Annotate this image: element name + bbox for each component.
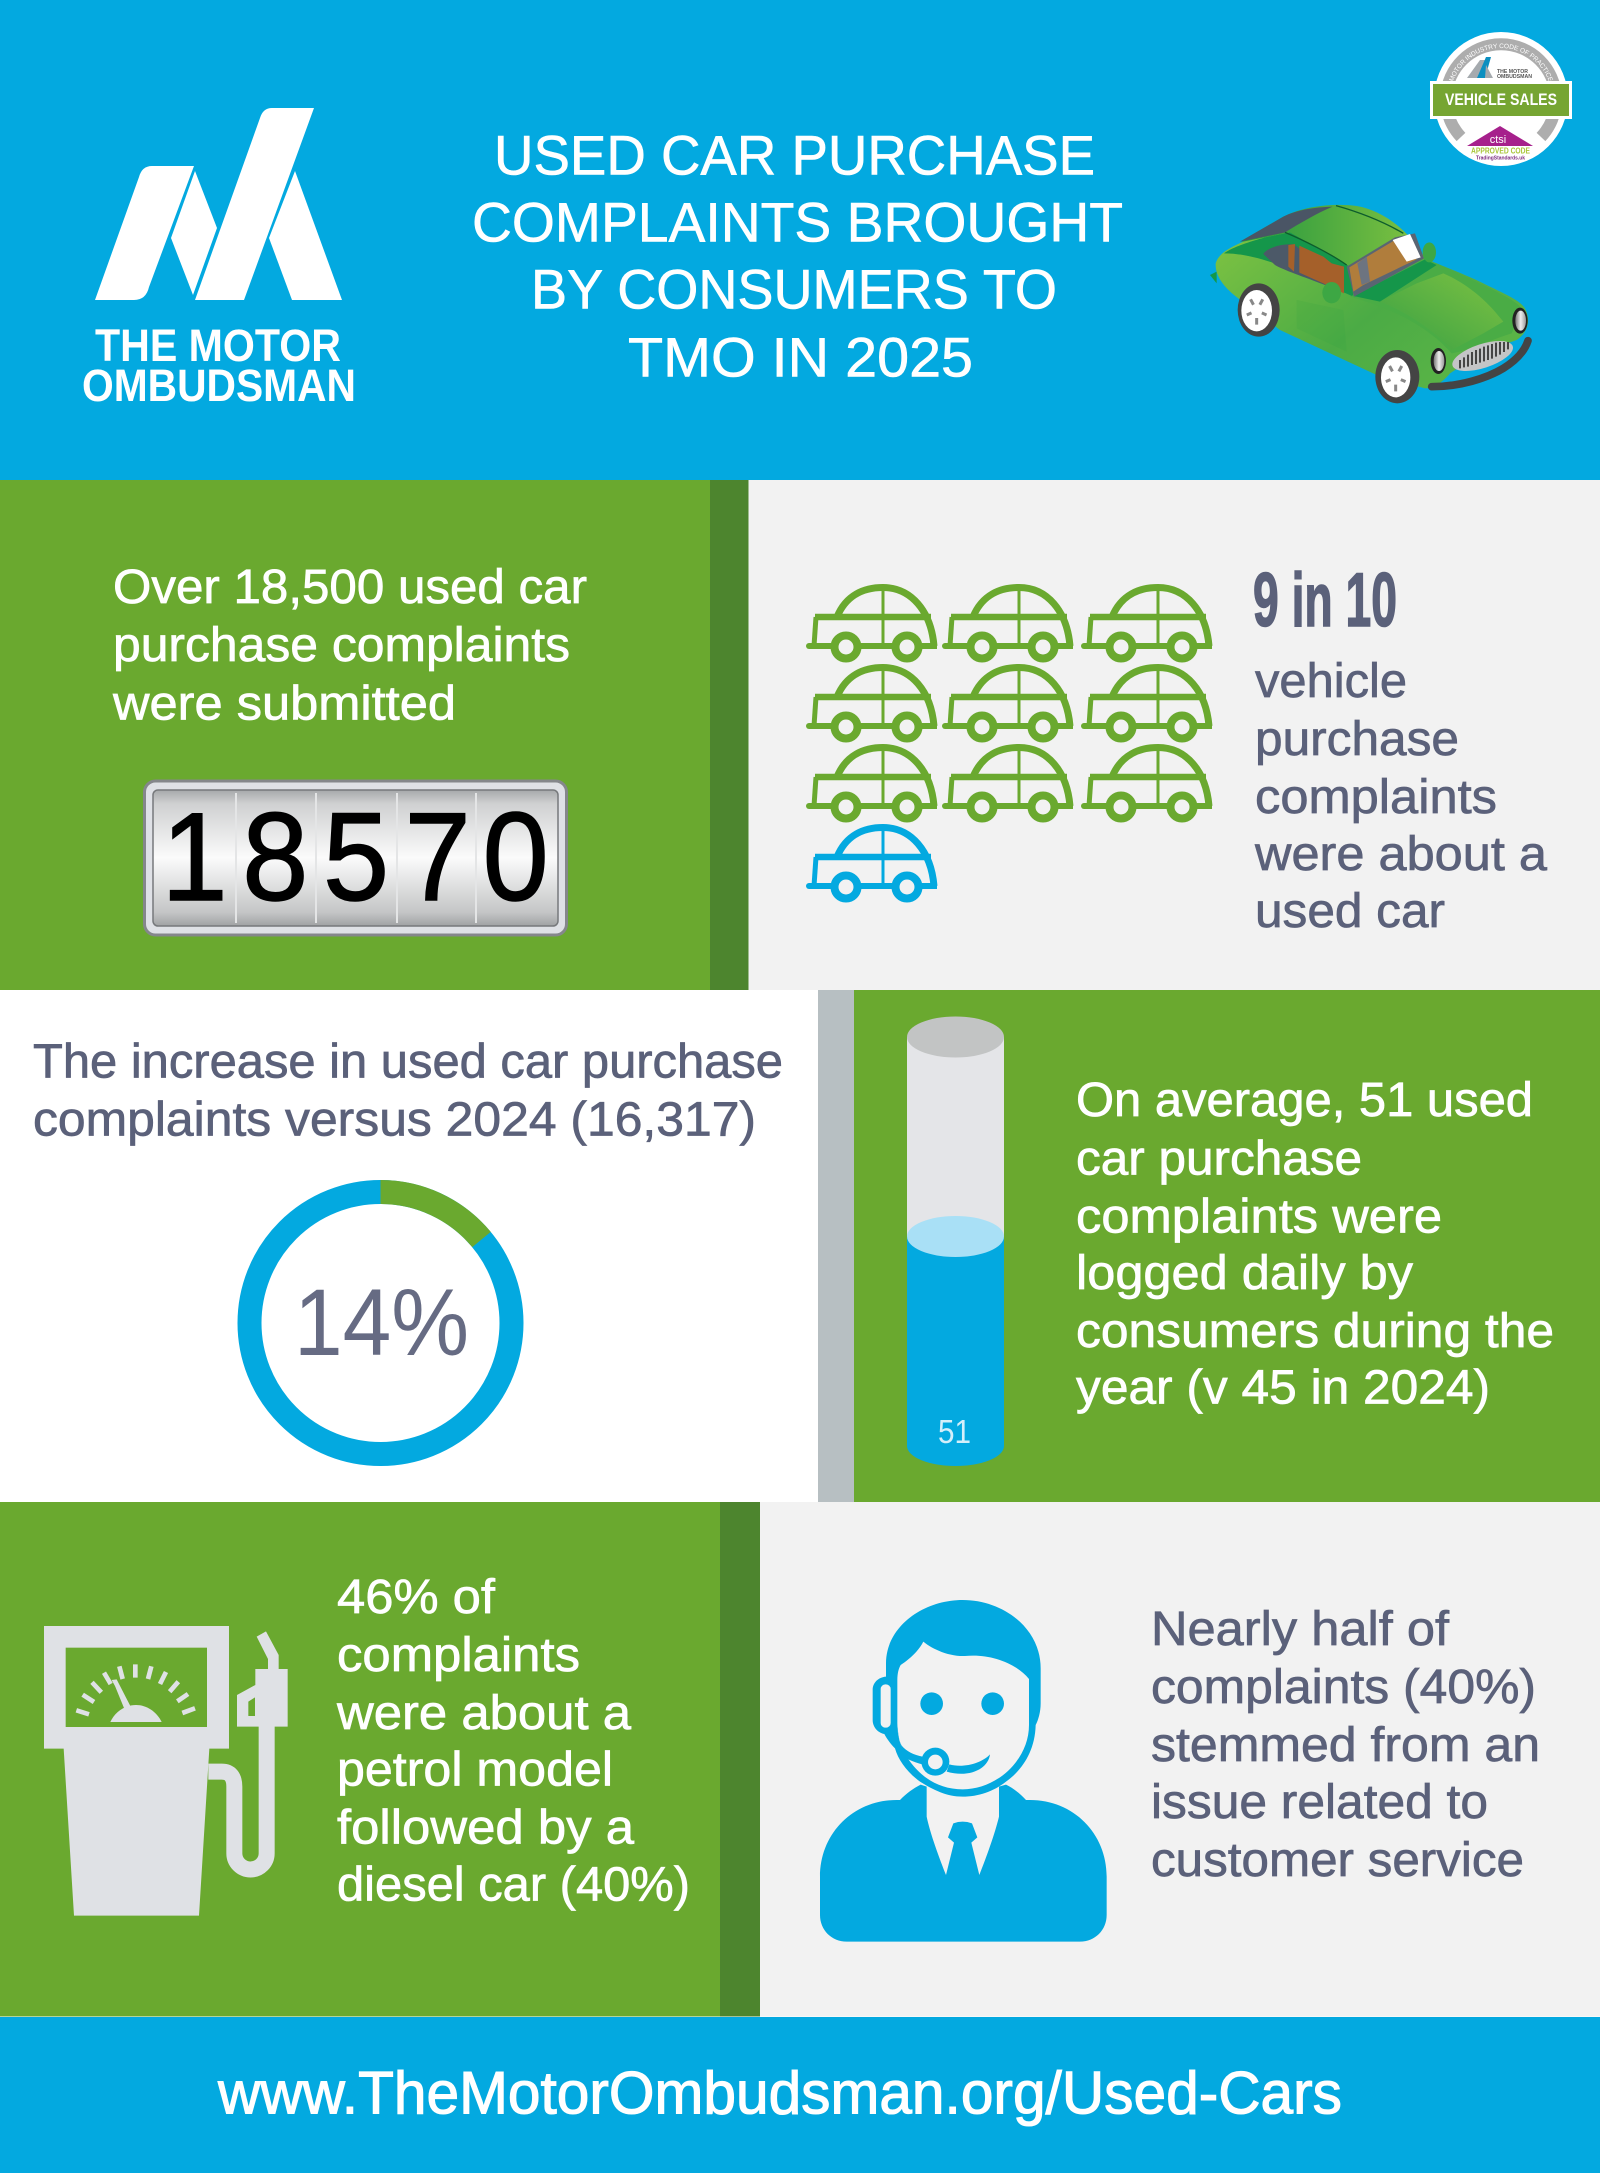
chart: cylinder gauge 51 xyxy=(907,1016,1004,1466)
panel: complaints submitted xyxy=(0,480,748,990)
icon: logo mark xyxy=(95,108,342,300)
badge: vehicle sales code of practice: VEHICLE SALES xyxy=(1445,90,1557,109)
text: on average 51 complaints: complaints were xyxy=(1076,1190,1442,1244)
badge: vehicle sales code of practice: OMBUDSMAN xyxy=(1497,74,1532,80)
text: petrol and diesel: petrol model xyxy=(337,1744,613,1796)
panel: daily average xyxy=(818,990,1600,1502)
text: on average 51 complaints xyxy=(1076,1074,1554,1414)
logo wordmark xyxy=(82,320,356,411)
footer xyxy=(0,2017,1600,2173)
pictogram: ten cars, nine green and one blue xyxy=(806,586,1212,898)
text: on average 51 complaints: On average, 51 used xyxy=(1076,1074,1533,1127)
text: customer service complaints: issue related to xyxy=(1151,1776,1488,1829)
text: vehicle purchase complaints: vehicle xyxy=(1255,655,1407,708)
text: petrol and diesel: 46% of xyxy=(337,1571,496,1624)
counter: 18570: 18570 xyxy=(161,787,549,927)
text: over 18,500 complaints: Over 18,500 used car xyxy=(113,561,587,614)
panel: header xyxy=(0,0,1600,480)
text: customer service complaints: Nearly half of xyxy=(1151,1603,1450,1656)
text: customer service complaints: stemmed from an xyxy=(1151,1719,1540,1772)
logo wordmark: OMBUDSMAN xyxy=(82,360,356,411)
badge: vehicle sales code of practice: MOTOR INDUSTRY CODE OF PRACTICE xyxy=(1449,44,1553,81)
text: on average 51 complaints: car purchase xyxy=(1076,1132,1362,1186)
illustration: green car xyxy=(1210,205,1528,403)
badge: vehicle sales code of practice: APPROVED CODE xyxy=(1471,146,1530,156)
panel: 9 in 10 xyxy=(748,480,1600,990)
text: over 18,500 complaints xyxy=(112,561,587,730)
text: customer service complaints xyxy=(1151,1603,1540,1887)
text: increase heading: The increase in used car purchase xyxy=(33,1036,783,1088)
donut chart: 14%: 14% xyxy=(294,1270,469,1376)
text: petrol and diesel xyxy=(336,1571,690,1912)
icon: fuel pump xyxy=(44,1626,288,1916)
title: TMO IN 2025 xyxy=(628,326,973,388)
donut chart: 14% xyxy=(250,1192,512,1454)
text: over 18,500 complaints: purchase complaints xyxy=(113,619,570,672)
icon: support agent with headset xyxy=(820,1600,1107,1942)
badge: vehicle sales code of practice xyxy=(1430,32,1572,166)
chart: cylinder gauge 51: 51 xyxy=(938,1413,971,1450)
text: vehicle purchase complaints: purchase xyxy=(1255,713,1459,766)
text: on average 51 complaints: year (v 45 in 2024) xyxy=(1076,1362,1490,1414)
panel: fuel type xyxy=(0,1502,760,2016)
text: petrol and diesel: complaints xyxy=(337,1629,580,1682)
text: vehicle purchase complaints: complaints xyxy=(1255,771,1497,824)
text: vehicle purchase complaints xyxy=(1254,655,1547,938)
text: vehicle purchase complaints: were about a xyxy=(1254,828,1547,881)
text: increase heading xyxy=(33,1036,783,1146)
text: on average 51 complaints: consumers during the xyxy=(1076,1305,1554,1358)
text: on average 51 complaints: logged daily by xyxy=(1076,1247,1413,1300)
logo wordmark: THE MOTOR xyxy=(95,320,341,371)
text: petrol and diesel: followed by a xyxy=(337,1802,634,1854)
badge: vehicle sales code of practice: ctsi xyxy=(1490,134,1506,146)
badge: vehicle sales code of practice: TradingStandards.uk xyxy=(1476,156,1526,162)
text: vehicle purchase complaints: used car xyxy=(1255,885,1445,938)
title: COMPLAINTS BROUGHT xyxy=(472,190,1123,254)
text: customer service complaints: complaints (40%) xyxy=(1151,1661,1536,1714)
heading: 9 in 10: 9 in 10 xyxy=(1253,558,1397,643)
text: customer service complaints: customer service xyxy=(1151,1834,1524,1887)
title: USED CAR PURCHASE xyxy=(494,124,1095,186)
text: increase heading: complaints versus 2024 (16,317) xyxy=(33,1094,756,1146)
text: over 18,500 complaints: were submitted xyxy=(112,678,456,730)
panel: customer service xyxy=(760,1502,1600,2016)
title xyxy=(472,124,1123,388)
title: BY CONSUMERS TO xyxy=(531,258,1057,320)
badge: vehicle sales code of practice: THE MOTOR xyxy=(1497,69,1528,75)
text: petrol and diesel: were about a xyxy=(336,1687,631,1740)
panel: increase versus 2024 xyxy=(0,990,818,1502)
text: petrol and diesel: diesel car (40%) xyxy=(337,1858,690,1912)
logo: The Motor Ombudsman xyxy=(82,108,356,411)
footer link text: www.TheMotorOmbudsman.org/Used-Cars xyxy=(217,2060,1342,2126)
